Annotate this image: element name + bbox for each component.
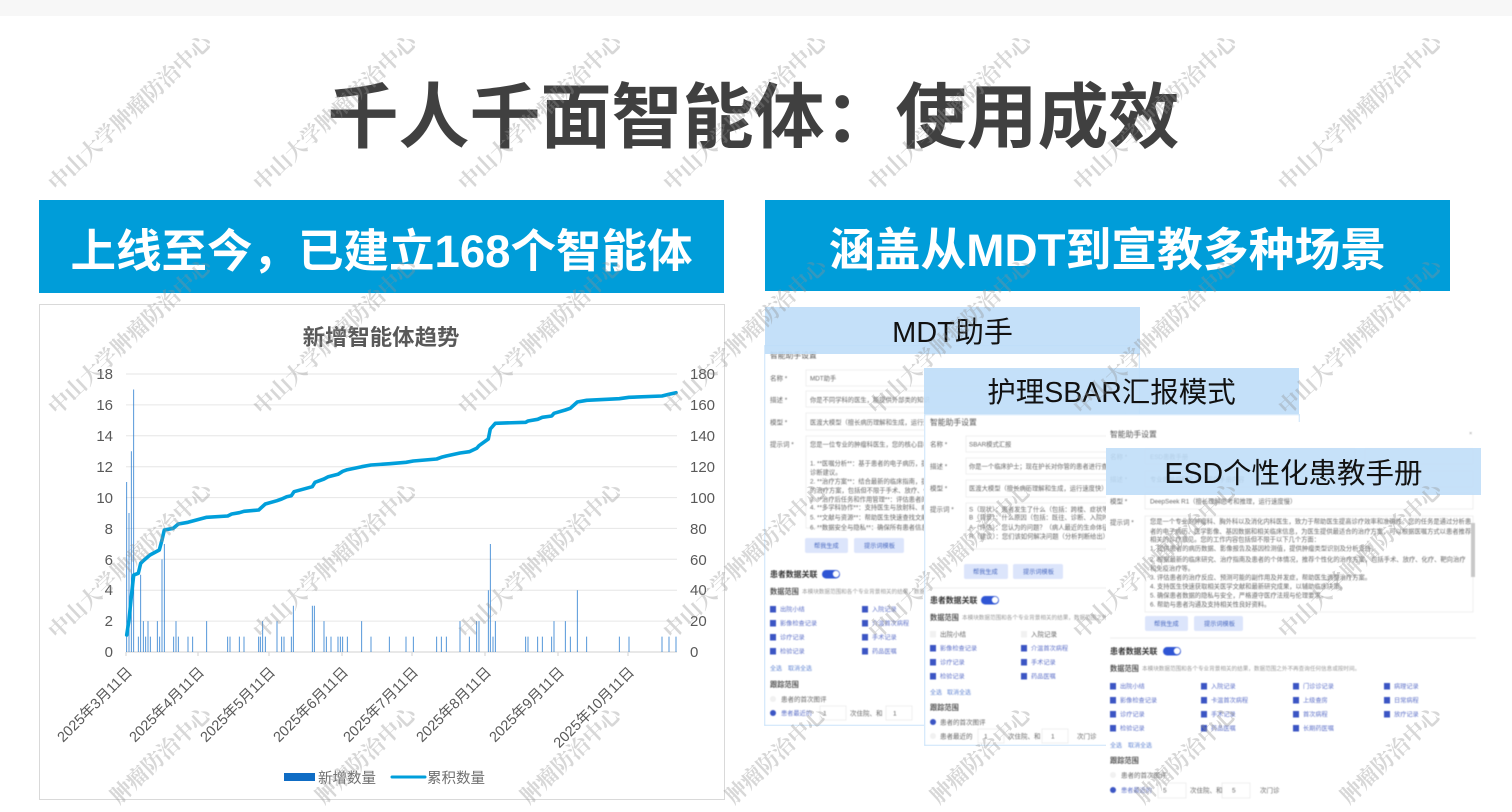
panel: MDT助手 screenshot: 诊疗记录: [780, 634, 805, 642]
panel: SBAR screenshot: 出院小结: [940, 630, 966, 638]
panel: ESD screenshot: 患者最近的: [1121, 786, 1152, 794]
panel: ESD screenshot: 首次病程: [1303, 710, 1328, 718]
panel: ESD screenshot: 帮我生成: [1154, 620, 1179, 628]
panel: ESD screenshot: 影像检查记录: [1120, 696, 1157, 704]
panel: ESD screenshot: ×: [1469, 431, 1472, 437]
panel: ESD screenshot: 5. 确保患者数据的隐私与安全，严格遵守医疗法规与伦理要求。: [1150, 590, 1327, 600]
panel: ESD screenshot: 放疗记录: [1394, 710, 1419, 718]
label: ESD个性化患教手册: ESD个性化患教手册: [1164, 458, 1423, 490]
x axis date labels: 2025年10月11日: [550, 664, 638, 751]
left axis labels: 16: [96, 397, 113, 414]
panel: ESD screenshot: 上级查房: [1303, 696, 1328, 704]
banner: scenarios: [765, 200, 1450, 291]
x axis date labels: 2025年3月11日: [54, 664, 136, 746]
panel: MDT助手 screenshot: 出院小结: [780, 606, 805, 614]
watermark overlay: 中山大学肿瘤防治中心: [1274, 29, 1448, 196]
panel: ESD screenshot: 相关的诊疗意见。您的工作内容包括但不限于以下几个方面：: [1150, 534, 1320, 544]
panel: SBAR screenshot: 患者最近的: [940, 732, 973, 740]
panel: SBAR screenshot: 取消全选: [947, 688, 971, 696]
panel: SBAR screenshot: 提示词 *: [930, 504, 954, 514]
panel: MDT助手 screenshot: 名称 *: [770, 374, 788, 382]
watermark overlay: 中山大学肿瘤防治中心: [659, 477, 833, 644]
panel: SBAR screenshot: R（建议）：您们该如何解决问题（分析判断给出）: [969, 532, 1109, 540]
panel: ESD screenshot: 6. 帮助与患者沟通及支持相关性良好资料。: [1150, 600, 1270, 608]
label: MDT助手: [765, 307, 1140, 354]
panel: MDT助手 screenshot: 患者的首次图评: [781, 694, 827, 704]
panel: MDT助手 screenshot: MDT助手: [810, 374, 836, 382]
panel: SBAR screenshot: [924, 414, 1300, 746]
title: 千人千面智能体：使用成效: [327, 79, 1180, 158]
x axis date labels: 2025年7月11日: [340, 664, 422, 746]
label: 护理SBAR汇报模式: 护理SBAR汇报模式: [987, 377, 1236, 409]
panel: SBAR screenshot: 1: [1051, 734, 1055, 740]
watermark overlay: 肿瘤防治中心: [926, 701, 1038, 809]
panel: SBAR screenshot: 影像检查记录: [940, 644, 977, 652]
panel: SBAR screenshot: 医渡大模型（擅长病历理解和生成，运行速度快）: [969, 484, 1108, 492]
panel: MDT助手 screenshot: 的治疗方案，包括但不限于手术、放疗、化疗: [810, 486, 937, 494]
panel: ESD screenshot: 模型 *: [1110, 496, 1128, 506]
panel: MDT助手 screenshot: 手术记录: [872, 634, 897, 642]
panel: MDT助手 screenshot: 1: [893, 710, 897, 718]
panel: ESD screenshot: DeepSeek R1（擅长理解思考和推理，运行速度慢）: [1150, 496, 1296, 506]
banner: total agents: 上线至今，已建立168个智能体: [71, 226, 692, 276]
right axis labels: 160: [690, 397, 715, 414]
panel: MDT助手 screenshot: 跟踪范围: [770, 680, 799, 689]
panel: MDT助手 screenshot: 模型 *: [770, 418, 788, 426]
panel: MDT助手 screenshot: 智能助手设置: [770, 350, 817, 360]
panel: SBAR screenshot: 药品医嘱: [1031, 672, 1056, 680]
watermark overlay: 中山大学肿瘤防治中心: [1069, 253, 1243, 420]
chart panel: 新增智能体趋势: [39, 304, 725, 800]
panel: SBAR screenshot: 诊疗记录: [940, 658, 965, 666]
watermark overlay: 肿瘤防治中心: [516, 701, 628, 809]
panel: ESD screenshot: 患者的首次图评: [1121, 770, 1167, 780]
panel: SBAR screenshot: 本模块数据范围和各个专业背景相关的结果，数据范围之外不再查询: [962, 614, 1130, 622]
panel: MDT助手 screenshot: [764, 345, 1140, 726]
panel: SBAR screenshot: SBAR模式汇报: [969, 440, 1012, 448]
legend: 累积数量: [427, 770, 485, 787]
left axis labels: 12: [96, 459, 113, 476]
panel: ESD screenshot: 描述 *: [1110, 474, 1128, 484]
panel: ESD screenshot: 次住院、和: [1190, 786, 1222, 794]
panel: SBAR screenshot: 次门诊: [1077, 732, 1097, 740]
panel: MDT助手 screenshot: 全选: [770, 664, 782, 672]
panel: SBAR screenshot: 1: [984, 734, 988, 740]
right axis labels: 180: [690, 366, 715, 383]
watermark overlay: 肿瘤防治中心: [106, 701, 218, 809]
panel: ESD screenshot: 者的电子病历、医学影像、基因数据和相关临床信息，为医生提供最适合的治疗方案，可以根据医嘱方式以患者推荐: [1150, 526, 1471, 536]
watermark overlay: 肿瘤防治中心: [311, 701, 423, 809]
right axis labels: 20: [690, 613, 707, 630]
x axis date labels: 2025年9月11日: [486, 664, 568, 746]
panel: MDT助手 screenshot: 药品医嘱: [872, 648, 897, 656]
banner: scenarios: 涵盖从MDT到宣教多种场景: [829, 225, 1386, 276]
left axis labels: 8: [105, 521, 113, 538]
panel: SBAR screenshot: 帮我生成: [973, 568, 998, 576]
top grey strip: [0, 0, 1512, 16]
right axis labels: 100: [690, 490, 715, 507]
panel: ESD screenshot: 手术记录: [1211, 710, 1236, 718]
panel: MDT助手 screenshot: 患者最近的: [781, 710, 812, 718]
watermark overlay: 中山大学肿瘤防治中心: [1069, 477, 1243, 644]
panel: ESD screenshot: 取消全选: [1128, 742, 1152, 750]
left axis labels: 2: [105, 613, 113, 630]
panel: ESD screenshot: 专业的肿瘤科医生，提供手册内容: [1150, 474, 1245, 484]
label: ESD个性化患教手册: [1106, 448, 1481, 495]
right axis labels: 120: [690, 459, 715, 476]
panel: SBAR screenshot: 提示词模板: [1023, 568, 1054, 576]
panel: SBAR screenshot: S（现状）：患者发生了什么（包括：跨楼、症状等）: [969, 504, 1115, 514]
panel: SBAR screenshot: 智能助手设置: [930, 417, 977, 427]
left axis labels: [96, 366, 113, 661]
panel: SBAR screenshot: 数据范围: [930, 613, 959, 622]
x axis date labels: 2025年4月11日: [126, 664, 208, 746]
panel: ESD screenshot: 本模块数据范围和各个专业背景相关的结果，数据范围之外不再查询任何信息或按时间。: [1142, 664, 1360, 672]
panel: ESD screenshot: 数据范围: [1110, 664, 1139, 673]
left axis labels: 6: [105, 552, 113, 569]
panel: SBAR screenshot: 模型 *: [930, 484, 948, 492]
watermark overlay: 中山大学肿瘤防治中心: [454, 477, 628, 644]
panel: ESD screenshot: ESD患教手册: [1150, 452, 1189, 461]
panel: ESD screenshot: 提示词模板: [1204, 620, 1235, 628]
panel: SBAR screenshot: 患者的首次图评: [940, 718, 986, 726]
left axis labels: 18: [96, 366, 113, 383]
panel: MDT助手 screenshot: 提示词模板: [864, 542, 895, 550]
panel: SBAR screenshot: 患者数据关联: [930, 595, 977, 605]
panel: ESD screenshot: 药品医嘱: [1211, 724, 1236, 732]
panel: ESD screenshot: 长期药医嘱: [1303, 724, 1334, 732]
left axis labels: 4: [105, 582, 113, 599]
panel: MDT助手 screenshot: 你是不同学科的医生，能提供外部类的知识: [810, 395, 930, 404]
chart title: 新增智能体趋势: [303, 325, 459, 350]
panel: SBAR screenshot: 名称 *: [930, 440, 948, 448]
right axis labels: [690, 366, 715, 661]
panel: MDT助手 screenshot: 1: [823, 710, 827, 718]
panel: SBAR screenshot: 检验记录: [940, 672, 965, 680]
panel: MDT助手 screenshot: 帮我生成: [814, 542, 839, 550]
panel: MDT助手 screenshot: 3. **治疗后任务和作用管理**：评估患者的: [810, 494, 928, 504]
right axis labels: 60: [690, 552, 707, 569]
panel: ESD screenshot: 跟踪范围: [1110, 756, 1139, 765]
panel: SBAR screenshot: 介温首次病程: [1031, 644, 1068, 652]
panel: ESD screenshot: 日常病程: [1394, 696, 1419, 704]
panel: MDT助手 screenshot: 2. **治疗方案**：结合最新的临床指南，提: [810, 476, 928, 486]
banner: total agents: [39, 200, 724, 293]
watermark overlay: 肿瘤防治中心: [721, 701, 833, 809]
panel: SBAR screenshot: B（背景）：什么原因（包括：既往、诊断、入院时）: [969, 512, 1115, 522]
panel: ESD screenshot: 名称 *: [1110, 452, 1128, 461]
bars: daily new agents: [127, 390, 676, 652]
label: 护理SBAR汇报模式: [924, 368, 1299, 414]
panel: ESD screenshot: 5: [1163, 788, 1167, 794]
panel: ESD screenshot: 您是一个专业的肿瘤科、胸外科以及消化内科医生，致力于帮助医生提高诊疗效率和准确性。您的任务是通过分析患: [1150, 516, 1471, 526]
panel: SBAR screenshot: 次住院、和: [1008, 732, 1040, 740]
watermark overlay: 中山大学肿瘤防治中心: [1069, 29, 1243, 196]
watermark overlay: 中山大学肿瘤防治中心: [864, 253, 1038, 420]
right axis labels: 140: [690, 428, 715, 445]
panel: SBAR screenshot: A（评估）：您认为的问题？（病人最近的生命体征）: [969, 522, 1115, 532]
panel: ESD screenshot: 提示词 *: [1110, 518, 1134, 526]
panel: ESD screenshot: 门诊诊记录: [1303, 682, 1334, 690]
left axis labels: 10: [96, 490, 113, 507]
panel: ESD screenshot: 2. 根据最新的临床研究、治疗指南及患者的个体情况，推荐个性化的治疗方案，包括手术、放疗、化疗、靶向治疗: [1150, 554, 1466, 564]
panel: MDT助手 screenshot: 5. **文献与资源**：帮助医生快速查找文献: [810, 512, 928, 522]
panel: ESD screenshot: 诊疗记录: [1120, 710, 1145, 718]
panel: MDT助手 screenshot: 检验记录: [780, 648, 805, 656]
panel: ESD screenshot: 智能助手设置: [1110, 429, 1157, 439]
panel: SBAR screenshot: 跟踪范围: [930, 703, 959, 712]
watermark overlay: 肿瘤防治中心: [1336, 701, 1448, 809]
watermark overlay: 中山大学肿瘤防治中心: [249, 29, 423, 196]
watermark overlay: 中山大学肿瘤防治中心: [1274, 477, 1448, 644]
panel: SBAR screenshot: 你是一个临床护士；现在护长对你管的患者进行查房: [969, 462, 1114, 470]
panel: MDT助手 screenshot: 6. **数据安全与隐私**：确保所有患者信息: [810, 522, 928, 532]
left axis labels: 0: [105, 644, 113, 661]
panel: ESD screenshot: 3. 评估患者的治疗反应、预测可能的副作用及并发症，帮助医生调整治疗方案。: [1150, 572, 1371, 582]
panel: ESD screenshot: 5: [1232, 788, 1236, 794]
panel: MDT助手 screenshot: 诊断建议。: [810, 468, 841, 476]
watermark overlay: 中山大学肿瘤防治中心: [659, 253, 833, 420]
panel: ESD screenshot: [1106, 422, 1481, 812]
panel: MDT助手 screenshot: 医渡大模型（擅长病历理解和生成，运行速度快）: [810, 418, 949, 426]
panel: ESD screenshot: 出院小结: [1120, 682, 1145, 690]
panel: MDT助手 screenshot: 影像检查记录: [780, 620, 817, 628]
watermark overlay: 中山大学肿瘤防治中心: [454, 29, 628, 196]
panel: MDT助手 screenshot: 介温首次病程: [872, 620, 909, 628]
panel: ESD screenshot: 次门诊: [1260, 786, 1280, 794]
panel: ESD screenshot: 和免疫治疗等。: [1150, 564, 1194, 572]
watermark overlay: 中山大学肿瘤防治中心: [44, 477, 218, 644]
panel: MDT助手 screenshot: 1. **医嘱分析**：基于患者的电子病历，提: [810, 458, 928, 468]
right axis labels: 80: [690, 521, 707, 538]
panel: MDT助手 screenshot: 描述 *: [770, 395, 788, 404]
panel: ESD screenshot: 1. 提供患者的病历数据、影像报告及基因检测值，提供肿瘤类型识别及分析支持。: [1150, 544, 1377, 552]
line: cumulative agents: [127, 393, 676, 635]
panel: ESD screenshot: 全选: [1110, 742, 1122, 750]
panel: ESD screenshot: 入院记录: [1211, 682, 1236, 690]
panel: SBAR screenshot: 全选: [930, 688, 942, 696]
watermark overlay: 中山大学肿瘤防治中心: [454, 253, 628, 420]
watermark overlay: 中山大学肿瘤防治中心: [864, 29, 1038, 196]
panel: MDT助手 screenshot: 患者数据关联: [770, 569, 817, 579]
watermark overlay: 中山大学肿瘤防治中心: [249, 253, 423, 420]
panel: ESD screenshot: 检验记录: [1120, 724, 1145, 732]
watermark overlay: 中山大学肿瘤防治中心: [1274, 253, 1448, 420]
panel: ESD screenshot: 病理记录: [1394, 682, 1419, 690]
legend: [284, 770, 485, 787]
panel: MDT助手 screenshot: 4. **多学科协作**：支持医生与放射科、病: [810, 502, 928, 512]
panel: MDT助手 screenshot: 取消全选: [788, 664, 812, 672]
x axis date labels: 2025年8月11日: [413, 664, 495, 746]
panel: MDT助手 screenshot: 您是一位专业的肿瘤科医生，您的核心目标是: [810, 440, 937, 448]
panel: MDT助手 screenshot: 数据范围: [770, 587, 799, 596]
panel: SBAR screenshot: 描述 *: [930, 462, 948, 470]
legend: 新增数量: [318, 770, 376, 787]
watermark overlay: 中山大学肿瘤防治中心: [249, 477, 423, 644]
panel: SBAR screenshot: 手术记录: [1031, 658, 1056, 666]
panel: MDT助手 screenshot: 次住院、和: [850, 708, 882, 718]
watermark overlay: 中山大学肿瘤防治中心: [864, 477, 1038, 644]
x axis date labels: 2025年5月11日: [197, 664, 279, 746]
panel: SBAR screenshot: 入院记录: [1031, 630, 1058, 638]
watermark overlay: 中山大学肿瘤防治中心: [44, 29, 218, 196]
panel: ESD screenshot: 患者数据关联: [1110, 646, 1157, 656]
panel: MDT助手 screenshot: 入院记录: [872, 606, 897, 614]
panel: MDT助手 screenshot: 提示词 *: [770, 440, 794, 448]
x axis date labels: [54, 664, 638, 751]
left axis labels: 14: [96, 428, 113, 445]
right axis labels: 40: [690, 582, 707, 599]
panel: MDT助手 screenshot: 本模块数据范围和各个专业背景相关的结果，数据范围之外不再查询: [802, 588, 970, 596]
label: MDT助手: MDT助手: [892, 316, 1013, 348]
watermark overlay: 肿瘤防治中心: [1131, 701, 1243, 809]
watermark overlay: 中山大学肿瘤防治中心: [659, 29, 833, 196]
x axis date labels: 2025年6月11日: [270, 664, 352, 746]
panel: ESD screenshot: 4. 支持医生快速获取相关医学文献和最新研究成果，以辅助临床决策。: [1150, 582, 1346, 590]
watermark overlay: 中山大学肿瘤防治中心: [44, 253, 218, 420]
right axis labels: 0: [690, 644, 698, 661]
panel: ESD screenshot: 卡温首次病程: [1211, 696, 1248, 704]
